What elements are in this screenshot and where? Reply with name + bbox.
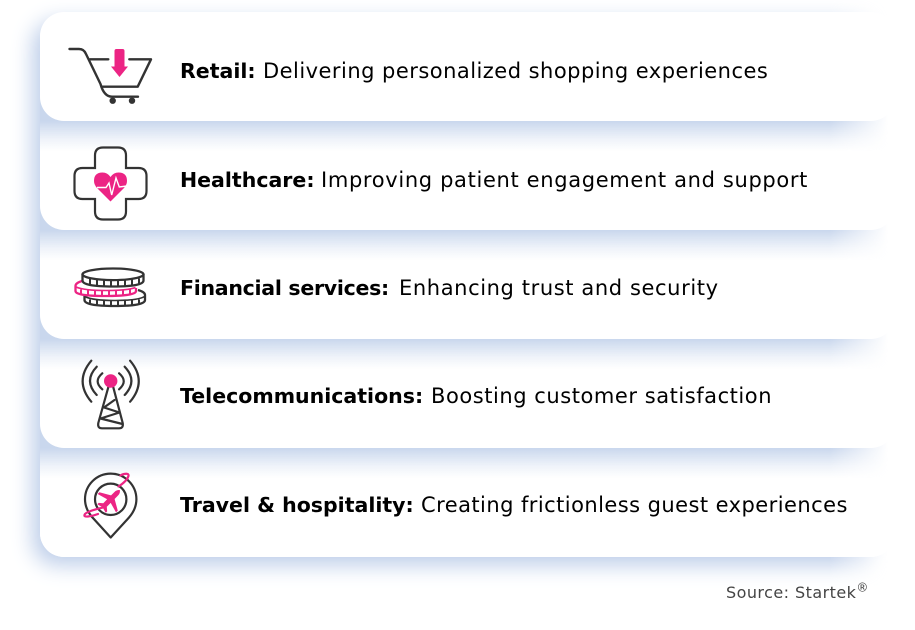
- icon: location pin with plane: [84, 474, 136, 538]
- label: retail text: Retail:: [180, 59, 256, 83]
- panel shadow: telecommunications: [40, 426, 879, 472]
- source note: Source: Startek®: [726, 581, 868, 602]
- panel: healthcare: [40, 121, 895, 230]
- panel: financial services: [40, 230, 895, 339]
- label: travel & hospitality text: Travel & hospitality:: [180, 493, 414, 517]
- icon: signal tower: [83, 361, 139, 428]
- icon: stacked coins: [76, 268, 145, 306]
- label: travel & hospitality text: [180, 493, 848, 517]
- panel: retail: [40, 12, 895, 121]
- panel shadow: healthcare: [40, 208, 879, 254]
- icon: medical cross with heart: [74, 148, 146, 220]
- label: telecommunications text: Telecommunications:: [180, 384, 423, 408]
- panel: travel & hospitality: [40, 448, 895, 557]
- label: healthcare text: Improving patient engagement and support: [321, 168, 808, 192]
- label: financial services text: [180, 276, 719, 300]
- label: travel & hospitality text: Creating frictionless guest experiences: [421, 493, 848, 517]
- label: telecommunications text: Boosting customer satisfaction: [431, 384, 772, 408]
- label: financial services text: Enhancing trust and security: [399, 276, 719, 300]
- label: financial services text: Financial services:: [180, 276, 389, 300]
- label: retail text: Delivering personalized shopping experiences: [263, 59, 768, 83]
- panel shadow: financial services: [40, 317, 879, 363]
- label: telecommunications text: [180, 384, 772, 408]
- panel: telecommunications: [40, 339, 895, 448]
- panel shadow: retail: [40, 99, 879, 145]
- icon: shopping cart: [70, 49, 151, 104]
- label: healthcare text: Healthcare:: [180, 168, 315, 192]
